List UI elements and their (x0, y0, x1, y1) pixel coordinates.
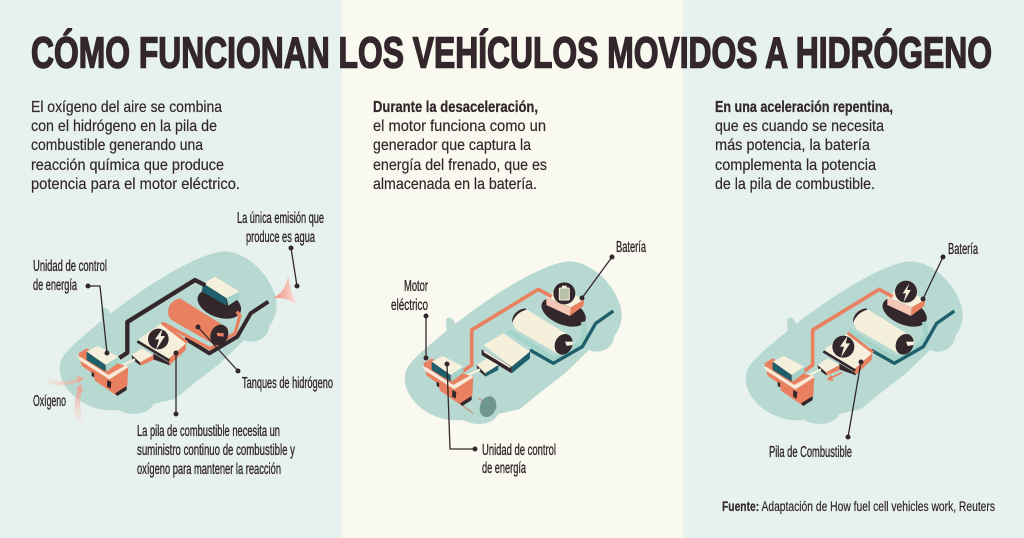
labels: left diagram: de energía (33, 277, 77, 294)
labels: left diagram: Oxígeno (33, 393, 66, 410)
arrow: power flow (828, 373, 842, 380)
text block: center description: el motor funciona como un (373, 118, 546, 135)
battery (537, 282, 590, 332)
labels: left diagram (33, 210, 333, 478)
battery (878, 281, 931, 332)
labels: center diagram: eléctrico (391, 297, 428, 314)
icon: wheel (462, 394, 499, 419)
hydrogen tank (512, 308, 576, 358)
hydrogen tank (853, 308, 917, 358)
text block: left description: combustible generando una (31, 137, 203, 154)
labels: left diagram: La pila de combustible necesita un (137, 423, 280, 440)
pipes (460, 289, 613, 373)
panel: center background (342, 0, 683, 538)
fuel cell (803, 332, 874, 378)
text block: right description (715, 99, 893, 193)
labels: center diagram: Motor (404, 278, 428, 295)
labels: left diagram: Unidad de control (33, 258, 107, 275)
text block: center description (373, 99, 547, 193)
text block: center description: energía del frenado, que es (373, 157, 547, 174)
icon: oxygen arrows (46, 376, 84, 423)
text block: left description: El oxígeno del aire se combina (31, 99, 222, 116)
labels: center diagram: Unidad de control (482, 442, 556, 459)
labels: center diagram (391, 239, 646, 477)
labels: left diagram: Tanques de hidrógeno (242, 375, 333, 392)
labels: right diagram (769, 241, 978, 461)
text block: right description: de la pila de combustible. (715, 176, 875, 193)
labels: left diagram: produce es agua (246, 229, 315, 246)
diagram: car during sudden acceleration (746, 261, 963, 424)
diagram: car during deceleration (405, 261, 622, 424)
text block: left description (31, 99, 240, 193)
text block: center description: almacenada en la batería. (373, 176, 537, 193)
panel: right background (683, 0, 1024, 538)
text block: center description: Durante la desaceleración, (373, 99, 538, 116)
text block: left description: potencia para el motor eléctrico. (31, 176, 240, 193)
text block: left description: con el hidrógeno en la pila de (31, 118, 217, 135)
labels: left diagram: suministro continuo de combustible y (137, 442, 295, 459)
fuel cell (117, 322, 188, 368)
diagram: car with fuel cell power (46, 251, 297, 423)
text block: right description: complementa la potencia (715, 157, 876, 174)
text block: right description: más potencia, la batería (715, 137, 870, 154)
labels: left diagram: oxígeno para mantener la reacción (137, 461, 281, 478)
hydrogen tank (168, 298, 232, 348)
labels: right diagram: Pila de Combustible (769, 444, 852, 461)
icon: water emission (273, 275, 297, 304)
text block: center description: generador que captura la (373, 137, 531, 154)
labels: center diagram: de energía (482, 460, 526, 477)
fuel cell (462, 333, 530, 378)
text block: right description: En una aceleración repentina, (715, 99, 893, 116)
panel: left background (0, 0, 342, 538)
text block: left description: reacción química que produce (31, 157, 224, 174)
labels: left diagram: La única emisión que (237, 210, 324, 227)
labels: right diagram: Batería (948, 241, 978, 258)
labels: center diagram: Batería (616, 239, 646, 256)
pipes (801, 289, 954, 373)
battery (193, 277, 245, 324)
pipes (119, 280, 268, 358)
text block: right description: que es cuando se necesita (715, 118, 884, 135)
